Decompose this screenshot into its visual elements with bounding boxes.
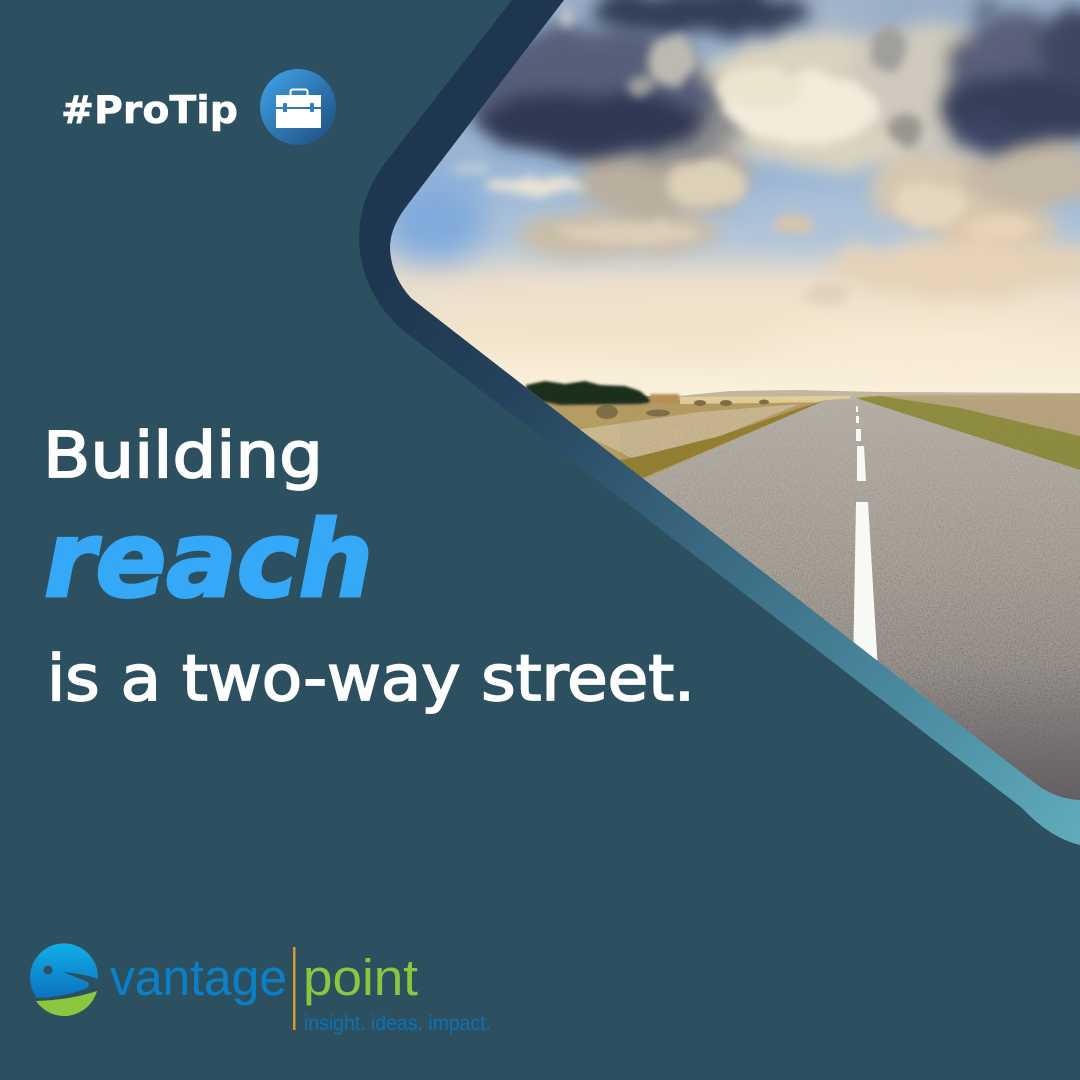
wordmark: point: point [303,949,418,1006]
hay bales [596,400,769,419]
tree line [526,381,679,405]
heading tag: #ProTip: #ProTip [61,88,238,132]
road grain [620,400,1080,800]
left grass verge [612,400,826,480]
far yellow field [680,396,850,404]
right field [862,394,1080,440]
road [644,398,1080,800]
logo divider [293,947,296,1030]
gradient ribbon framing the photo [359,0,1080,845]
sky [380,0,1080,400]
photo: open road under a cloudy sky [380,0,1080,810]
logo: Vantage Point [30,943,491,1035]
headline line: reach: reach [44,499,373,621]
tagline: insight. ideas. impact. [304,1012,491,1035]
headline [43,419,695,715]
lane markings [853,406,878,670]
distant hills [678,390,1080,400]
clouds [385,0,1080,376]
wordmark: vantage: vantage [110,949,287,1006]
icon: briefcase badge [260,69,336,145]
logo mark [30,943,98,1016]
left field pale grass [575,404,800,462]
headline line: is a two-way street.: is a two-way street. [47,642,695,715]
right verge [856,396,1080,470]
headline line: Building: Building [43,419,323,492]
ground base [500,396,1080,516]
